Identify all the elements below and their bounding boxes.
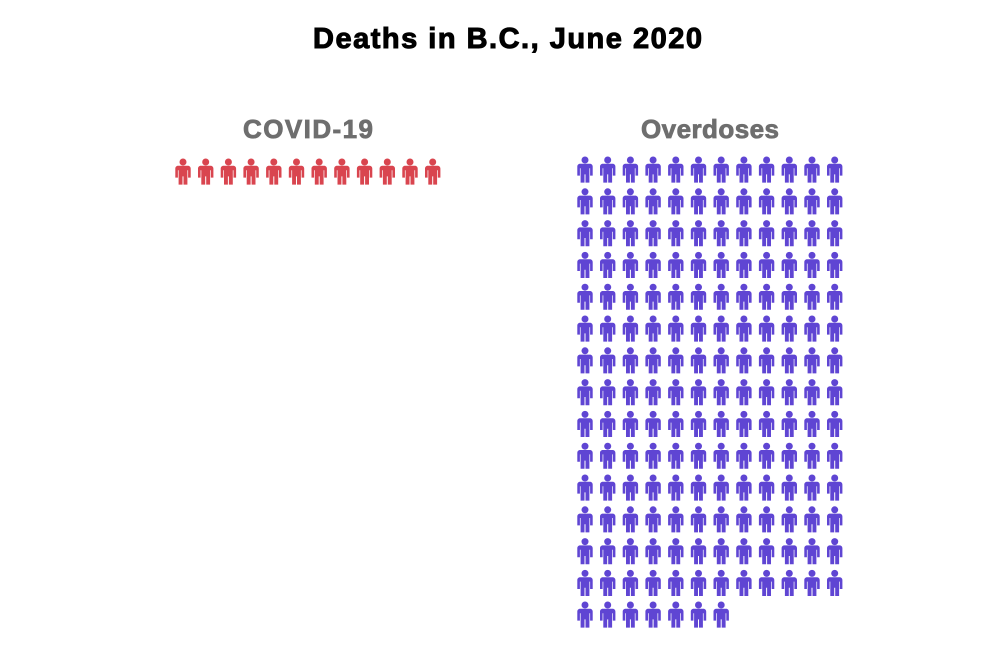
- panel: Overdoses: [577, 114, 842, 628]
- pictogram: 175 overdose deaths: [577, 156, 842, 628]
- pictogram: 12 COVID-19 deaths: [175, 158, 440, 185]
- heading: COVID-19: COVID-19: [243, 114, 373, 144]
- panel: COVID-19: [175, 114, 440, 185]
- heading: Overdoses: Overdoses: [641, 114, 779, 144]
- title: Deaths in B.C., June 2020: [313, 23, 702, 55]
